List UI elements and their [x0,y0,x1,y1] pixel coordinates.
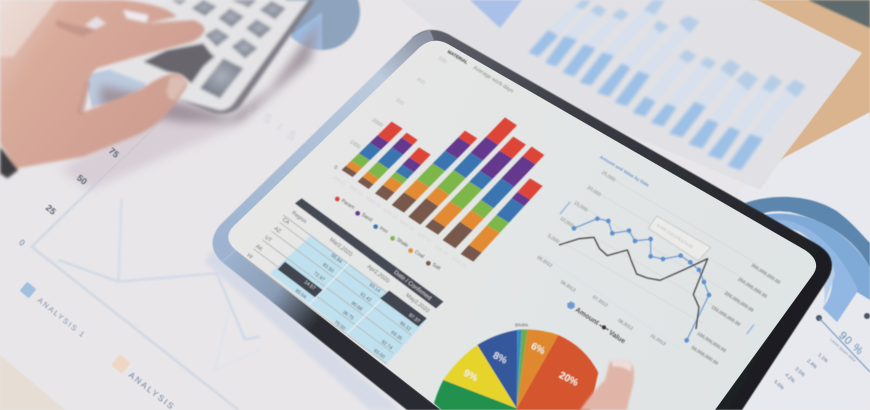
table header band [295,198,443,308]
pie chart [434,323,598,410]
chart line two [118,198,122,282]
hand wash highlight [0,0,57,57]
tablet body [412,30,832,410]
y axis labels: 1000 [348,139,361,151]
table values [294,253,421,360]
left chart axis numbers: 0 [17,237,27,248]
fingernail [612,360,632,372]
paper pie fragment, top [470,0,522,28]
left y axis labels: 20,000 [586,185,602,198]
bar 1 [342,122,403,177]
region column [246,210,308,261]
top bar caps [575,0,806,98]
table values: 99.32 [398,320,412,333]
small percentages: 5.6% [772,379,785,392]
thumb nail [167,76,187,100]
90 percent callout on paper [772,313,870,392]
date column headers: Apr2,2020 [366,264,390,284]
region column: CA [281,217,291,226]
table values: 83.00 [372,348,386,360]
chart line one [58,260,260,339]
x axis labels: 05.2012 [536,255,554,268]
table values: 14.57 [303,279,317,292]
bar 7 [443,147,544,248]
chart legend: Shale [395,237,409,249]
tooltip text: 5,000 154,578,674.00 [656,222,694,250]
pie labels: 20% [557,370,580,389]
bar 4 [392,131,477,213]
x axis labels: APR 15 [382,207,399,220]
legend: analysis 1 [20,282,88,340]
region column: AZ [273,226,282,235]
right y axis labels: 250,000,000.00 [736,276,768,300]
date column headers [328,237,430,314]
y axis labels: 400 [415,77,426,86]
legend amount marker [567,301,575,309]
y axis labels: 300 [394,97,405,107]
left y axis labels: 15,000 [573,200,589,214]
top right paper sheet [400,0,862,190]
wood table, lower left [0,355,65,410]
donut chart on lower right paper [745,197,870,322]
left chart axis numbers: 50 [75,173,89,187]
right y axis labels: 150,000,000.00 [710,304,741,328]
date column headers: May2,2020 [404,293,430,314]
amount markers [572,216,711,343]
calculator [110,0,315,114]
pie light wedge [290,12,322,50]
axis upper extension [100,110,173,180]
swatch 2 [111,354,131,374]
legend value label: Value [607,329,626,345]
pointing finger [580,360,634,410]
bar 6 [425,137,526,235]
donut pale ring [780,230,835,308]
hand shape [0,0,204,168]
table values: 83.50 [321,262,335,274]
grid lines [558,178,757,323]
calculator shadow [100,20,320,122]
legend: analysis 2 [111,354,177,410]
callout marker [816,315,822,321]
small pie labels: 5% [522,323,528,328]
table values: 85.04 [294,288,308,300]
donut dark ring [745,197,870,268]
tablet left rim [212,30,434,262]
faded paper lettering near calculator: YSIS [246,101,306,149]
left y axis labels [546,170,616,245]
value line [559,237,708,329]
keys under fingers [143,43,213,83]
stacked bar chart [331,49,544,272]
donut medium ring [763,213,870,322]
tablet shadow [205,250,400,410]
tooltip [648,216,711,261]
legend amount label: Amount [574,307,600,327]
chart axes [32,180,238,410]
chart legend: Iron [378,225,389,235]
tooltip box [648,216,711,261]
x axis labels: AUG 15 [451,255,468,269]
small percentages: 2.4% [805,358,818,371]
small percentages: 3.5% [793,366,806,379]
callout line [819,318,870,372]
chart line three [215,307,230,370]
gap highlight 2 [85,17,106,29]
chart legend: Sand [360,212,373,223]
region column: AK [254,244,264,253]
small pie labels [515,323,528,328]
x axis labels [331,174,468,269]
small percentages [772,352,829,392]
y axis labels: 0 [333,164,338,171]
table header text: Date / Confirmed [392,270,432,302]
label 1: ANALYSIS 1 [36,296,88,340]
line chart on tablet [536,154,781,367]
right y axis labels: 50,000,000.00 [690,345,719,367]
date column headers: Mar2,2020 [328,237,353,258]
table values: 72.97 [312,271,326,283]
left y axis labels: 10,000 [559,216,575,229]
red slice [517,335,598,410]
donut light ring [770,220,858,322]
right y axis labels: 100,000,000.00 [695,331,727,354]
callout value: 90 % [836,330,866,358]
callout caption: Lorem ipsum dolor [829,337,857,363]
x axis labels: MAY 15 [399,219,415,232]
x axis labels: JUN 15 [416,231,432,244]
line chart on left paper [32,180,260,410]
small percentages: 4.2% [783,372,796,385]
paper bar chart, top right [528,0,806,170]
left y axis labels: 25,000 [600,170,616,183]
orange slice [517,329,558,408]
chart legend: Coal [413,249,425,260]
blue paper gap under hand [85,60,150,108]
small pie labels: 5% [515,323,522,328]
left chart axis numbers: 25 [44,203,58,217]
y axis labels [333,56,448,171]
pink paper tint near hand [60,100,240,190]
table row lines [244,215,418,364]
region column: UT [263,235,273,244]
left chart axis numbers [17,146,121,248]
green slice [434,380,517,410]
blue thin slice [517,329,522,408]
small percentages: 1.1% [816,352,829,365]
wood table, upper right [750,0,870,162]
table values: 95.84 [329,253,343,265]
left axis title [560,202,570,214]
lower right paper sheet [700,112,870,410]
tablet [205,30,832,410]
data table [244,198,443,364]
pie labels: 8% [491,350,509,367]
green thin slice [517,329,528,408]
finger [580,360,634,410]
table values: 69.35 [389,330,403,342]
table blue cells [270,235,425,364]
calculator keys [172,0,286,98]
x axis line [542,255,680,348]
bar 2 [358,133,418,189]
tablet screen [228,41,816,410]
chart legend [335,197,442,272]
chart legend: Salt [431,262,442,272]
table values: 97.37 [407,312,421,325]
dark lower bar segments [528,30,763,170]
table values: 36.75 [341,309,355,322]
dark corner [808,0,870,28]
x axis labels [536,255,667,347]
right y axis labels: 300,000,000.00 [750,262,781,286]
chart title: Amount and Value by Date [599,154,650,188]
x axis labels: 07.2012 [592,294,609,308]
y axis labels: 500 [437,56,448,65]
x axis labels: JAN 15 [331,174,347,187]
paper pie under calculator [284,0,360,50]
yellow slice [443,345,517,408]
knuckle shading [55,20,97,115]
right axis title [747,325,754,334]
tablet lower rim [222,250,441,410]
chart legend: Param [340,198,355,211]
left y axis labels: 5,000 [546,233,560,245]
calculator dark side [180,0,315,114]
x axis labels: JUL 15 [434,244,449,257]
calculator body [110,0,308,110]
hand [0,0,204,178]
light bar columns [548,0,801,139]
table values: 93.14 [368,282,382,294]
watch strap [0,147,18,178]
x axis labels: 08.2012 [617,318,634,331]
chart line four [215,350,260,370]
pie labels: 9% [462,368,479,384]
dark cell right [380,291,427,327]
right y axis labels: 200,000,000.00 [723,290,755,314]
pie labels [462,341,580,389]
gap highlights between fingers [123,10,148,23]
amount line [574,219,709,340]
chart subtitle: Average work days [472,65,515,95]
blue slice [477,330,517,408]
region column: Region [290,210,308,225]
table values: 75.50 [333,320,347,332]
bar 3 [375,147,431,201]
y axis labels: 2000 [371,117,384,129]
left chart axis numbers: 75 [107,146,121,160]
region column: HI [246,253,254,261]
legend value marker [599,325,609,330]
swatch 1 [20,282,36,298]
bar 8 [461,178,543,262]
dark cell left [278,262,323,297]
x axis labels: MAR 15 [365,195,382,209]
chart title: MATERIAL [447,49,469,65]
x axis labels: 01.2013 [650,333,667,347]
table values: 80.68 [350,300,364,313]
bar 5 [408,117,517,225]
marker dot, right [864,313,870,319]
table values: 92.74 [380,339,394,351]
table column dividers [309,263,389,334]
right y axis labels [690,262,781,367]
x axis labels: 06.2012 [560,279,577,293]
x axis labels: FEB 15 [348,184,364,197]
pie labels: 6% [529,341,547,357]
pie disc [284,0,360,50]
table values: 61.42 [359,291,373,304]
